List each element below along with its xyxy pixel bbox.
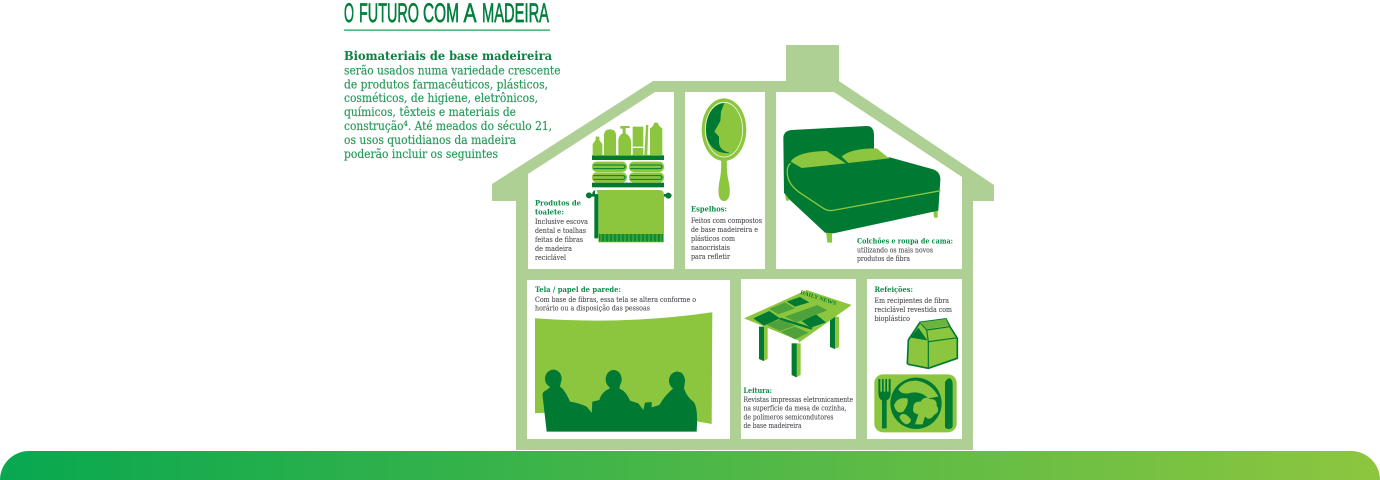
text: espelhos <box>691 204 762 261</box>
text: tela / papel de parede: horário ou a disposição das pessoas <box>535 304 650 312</box>
intro text block: os usos quotidianos da madeira <box>344 132 517 147</box>
text: leitura: de base madeireira <box>744 421 802 430</box>
panel: colchões e roupa de cama <box>776 92 962 269</box>
panel: produtos de toalete <box>528 92 674 269</box>
text: leitura: Revistas impressas eletronicamente <box>744 395 853 404</box>
text: leitura: na superfície da mesa de cozinha, <box>744 404 846 412</box>
text: colchões e roupa de cama: utilizando os mais novos <box>857 246 933 254</box>
intro text block <box>344 48 560 161</box>
intro text block: químicos, têxteis e materiais de <box>344 104 516 119</box>
text: produtos de toalete: feitas de fibras <box>535 235 583 244</box>
text: produtos de toalete <box>535 198 589 262</box>
text: tela / papel de parede: Com base de fibras, essa tela se altera conforme o <box>535 295 696 304</box>
text: espelhos: de base madeireira e <box>691 225 758 234</box>
text: produtos de toalete: de madeira <box>535 244 573 253</box>
intro text block: de produtos farmacêuticos, plásticos, <box>344 76 548 92</box>
text: refeições: bioplástico <box>874 314 910 323</box>
text: leitura: de polímeros semicondutores <box>744 412 834 422</box>
text: espelhos: para refletir <box>691 252 730 261</box>
illustration: wall screen <box>535 312 712 424</box>
text: refeições <box>874 285 952 323</box>
text: produtos de toalete: dental e toalhas <box>535 226 586 235</box>
panel: leitura <box>741 279 856 439</box>
text: produtos de toalete: Inclusive escova <box>535 217 589 226</box>
text: refeições: Em recipientes de fibra <box>874 296 950 305</box>
icon: food carton <box>907 319 957 368</box>
text: espelhos: nanocristais <box>691 243 730 252</box>
text: produtos de toalete: reciclável <box>535 253 567 262</box>
intro text block: serão usados numa variedade crescente <box>344 62 560 78</box>
illustration: three seated people <box>542 370 697 432</box>
intro text block: construção⁴. Até meados do século 21, <box>344 118 552 133</box>
panel: espelhos <box>685 92 765 269</box>
text: refeições: reciclável revestida com <box>874 305 952 314</box>
text: produtos de toalete: toalete: <box>535 208 564 216</box>
intro text block: poderão incluir os seguintes <box>344 146 498 161</box>
intro text block: Biomateriais de base madeireira <box>344 48 552 63</box>
text: leitura <box>744 386 853 430</box>
text: espelhos: Feitos com compostos <box>691 216 762 225</box>
icon: bed <box>783 126 941 243</box>
text: tela / papel de parede <box>535 285 696 312</box>
icon: bottles, towels and rack <box>586 123 672 242</box>
panel: refeições <box>867 279 962 439</box>
bottom gradient bar <box>0 451 1380 480</box>
title <box>344 0 550 31</box>
text: colchões e roupa de cama <box>857 236 953 263</box>
text: tela / papel de parede: Tela / papel de parede: <box>535 285 621 294</box>
icon: news table <box>744 290 852 377</box>
text: refeições: Refeições: <box>874 285 913 294</box>
text: colchões e roupa de cama: produtos de fibra <box>857 254 911 263</box>
panel: tela / papel de parede <box>527 280 730 439</box>
text: colchões e roupa de cama: Colchões e roupa de cama: <box>857 236 953 246</box>
icon: hand mirror <box>702 98 746 201</box>
text: espelhos: Espelhos: <box>691 204 727 214</box>
intro text block: cosméticos, de higiene, eletrônicos, <box>344 90 538 105</box>
text: espelhos: plásticos com <box>691 234 735 243</box>
text: leitura: Leitura: <box>744 386 772 395</box>
text: produtos de toalete: Produtos de <box>535 198 581 208</box>
house outline <box>492 45 994 450</box>
icon: news table: DAILY NEWS <box>799 290 837 307</box>
icon: meal on tray <box>874 374 957 432</box>
